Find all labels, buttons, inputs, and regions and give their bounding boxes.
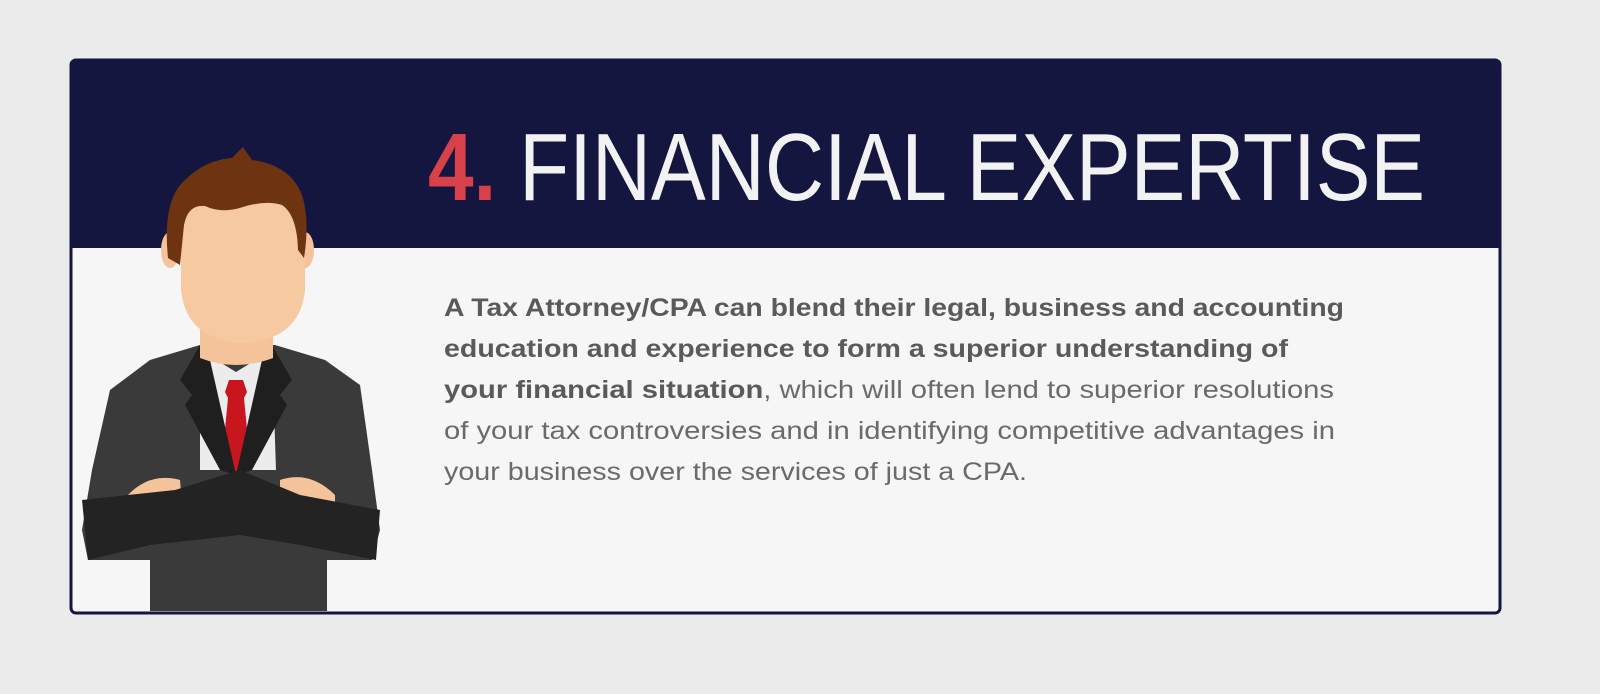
text block: description: A Tax Attorney/CPA can blend their legal, business and accounting	[444, 294, 1344, 322]
panel: card	[71, 60, 1500, 613]
text block: description: education and experience to form a superior understanding of	[444, 335, 1289, 363]
hands	[128, 478, 182, 505]
icon: businessman	[82, 147, 380, 611]
title: 4. FINANCIAL EXPERTISE	[428, 114, 1425, 221]
text block: description: your business over the services of just a CPA.	[444, 458, 1027, 486]
header band	[71, 60, 1500, 248]
hair	[167, 147, 307, 265]
text block: description: your financial situation , which will often lend to superior resolutions	[444, 376, 1334, 404]
text block: description	[444, 294, 1344, 486]
lapels	[180, 345, 236, 475]
tie	[222, 380, 250, 472]
shirt	[200, 350, 276, 470]
body / jacket	[82, 345, 380, 611]
face	[181, 195, 305, 343]
text block: description: of your tax controversies and in identifying competitive advantages in	[444, 417, 1335, 445]
neck	[200, 318, 273, 365]
ears	[161, 232, 179, 268]
crossed arms	[82, 470, 380, 560]
